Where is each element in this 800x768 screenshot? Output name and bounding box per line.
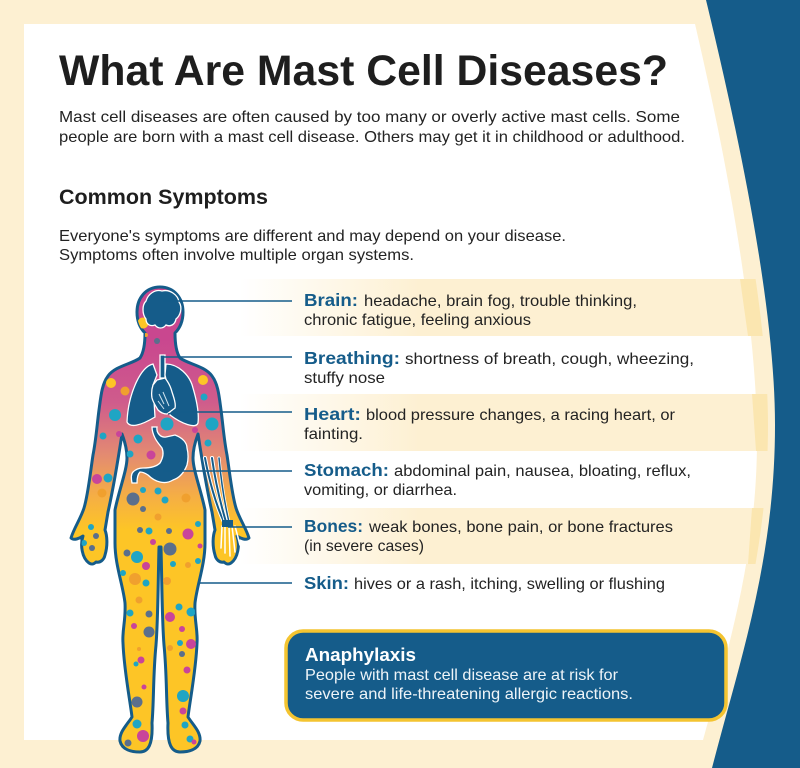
intro text: Mast cell diseases are often caused by too many or overly active mast cells. Some bbox=[59, 109, 680, 126]
symptom: breathing: Breathing: bbox=[304, 348, 400, 368]
symptom: skin: Skin: bbox=[304, 573, 349, 593]
symptom: bones bbox=[304, 516, 673, 555]
symptom: stomach: Stomach: bbox=[304, 460, 389, 480]
title: What Are Mast Cell Diseases? bbox=[59, 47, 668, 95]
body silhouette bbox=[71, 287, 249, 752]
intro text: people are born with a mast cell disease. Others may get it in childhood or adulthood. bbox=[59, 129, 685, 146]
symptoms intro text: Everyone's symptoms are different and may depend on your disease. bbox=[59, 228, 566, 245]
side panel: blue curve bbox=[706, 0, 800, 768]
symptom: heart: blood pressure changes, a racing heart, or bbox=[366, 407, 675, 424]
organ: brain bbox=[143, 291, 181, 328]
organ: heart bbox=[152, 378, 175, 414]
callout: anaphylaxis: Anaphylaxis bbox=[305, 645, 416, 665]
leader lines bbox=[162, 301, 292, 583]
symptom: heart: Heart: bbox=[304, 404, 361, 424]
symptom: brain: Brain: bbox=[304, 290, 358, 310]
symptom: skin: hives or a rash, itching, swelling or flushing bbox=[354, 576, 665, 593]
skin dots bbox=[81, 318, 218, 746]
symptom: breathing bbox=[304, 348, 694, 387]
symptom: skin bbox=[304, 573, 665, 593]
symptom row bands bbox=[240, 279, 780, 564]
symptom: breathing: stuffy nose bbox=[304, 370, 385, 387]
callout: anaphylaxis: severe and life-threatening allergic reactions. bbox=[305, 686, 633, 703]
symptoms intro text bbox=[59, 228, 566, 264]
symptom: bones: Bones: bbox=[304, 516, 363, 536]
symptom: brain: headache, brain fog, trouble thinking, bbox=[364, 293, 637, 310]
symptom: stomach: abdominal pain, nausea, bloating, reflux, bbox=[394, 463, 691, 480]
organ: lungs and trachea bbox=[127, 355, 198, 426]
symptom: brain: chronic fatigue, feeling anxious bbox=[304, 312, 531, 329]
symptom: heart bbox=[304, 404, 675, 443]
organ: stomach bbox=[131, 427, 188, 483]
body figure bbox=[71, 287, 249, 752]
symptom: bones: (in severe cases) bbox=[304, 538, 424, 555]
symptom: breathing: shortness of breath, cough, wheezing, bbox=[405, 351, 694, 368]
symptom: heart: fainting. bbox=[304, 426, 363, 443]
symptom: bones: weak bones, bone pain, or bone fractures bbox=[368, 519, 673, 536]
symptoms intro text: Symptoms often involve multiple organ systems. bbox=[59, 247, 414, 264]
organ: arm and hand bones bbox=[205, 458, 240, 556]
callout: anaphylaxis bbox=[286, 631, 726, 720]
intro text bbox=[59, 109, 685, 146]
symptom: stomach bbox=[304, 460, 691, 499]
callout: anaphylaxis: People with mast cell disease are at risk for bbox=[305, 667, 618, 684]
symptom: brain bbox=[304, 290, 637, 329]
heading: common symptoms: Common Symptoms bbox=[59, 186, 268, 209]
symptom: stomach: vomiting, or diarrhea. bbox=[304, 482, 457, 499]
